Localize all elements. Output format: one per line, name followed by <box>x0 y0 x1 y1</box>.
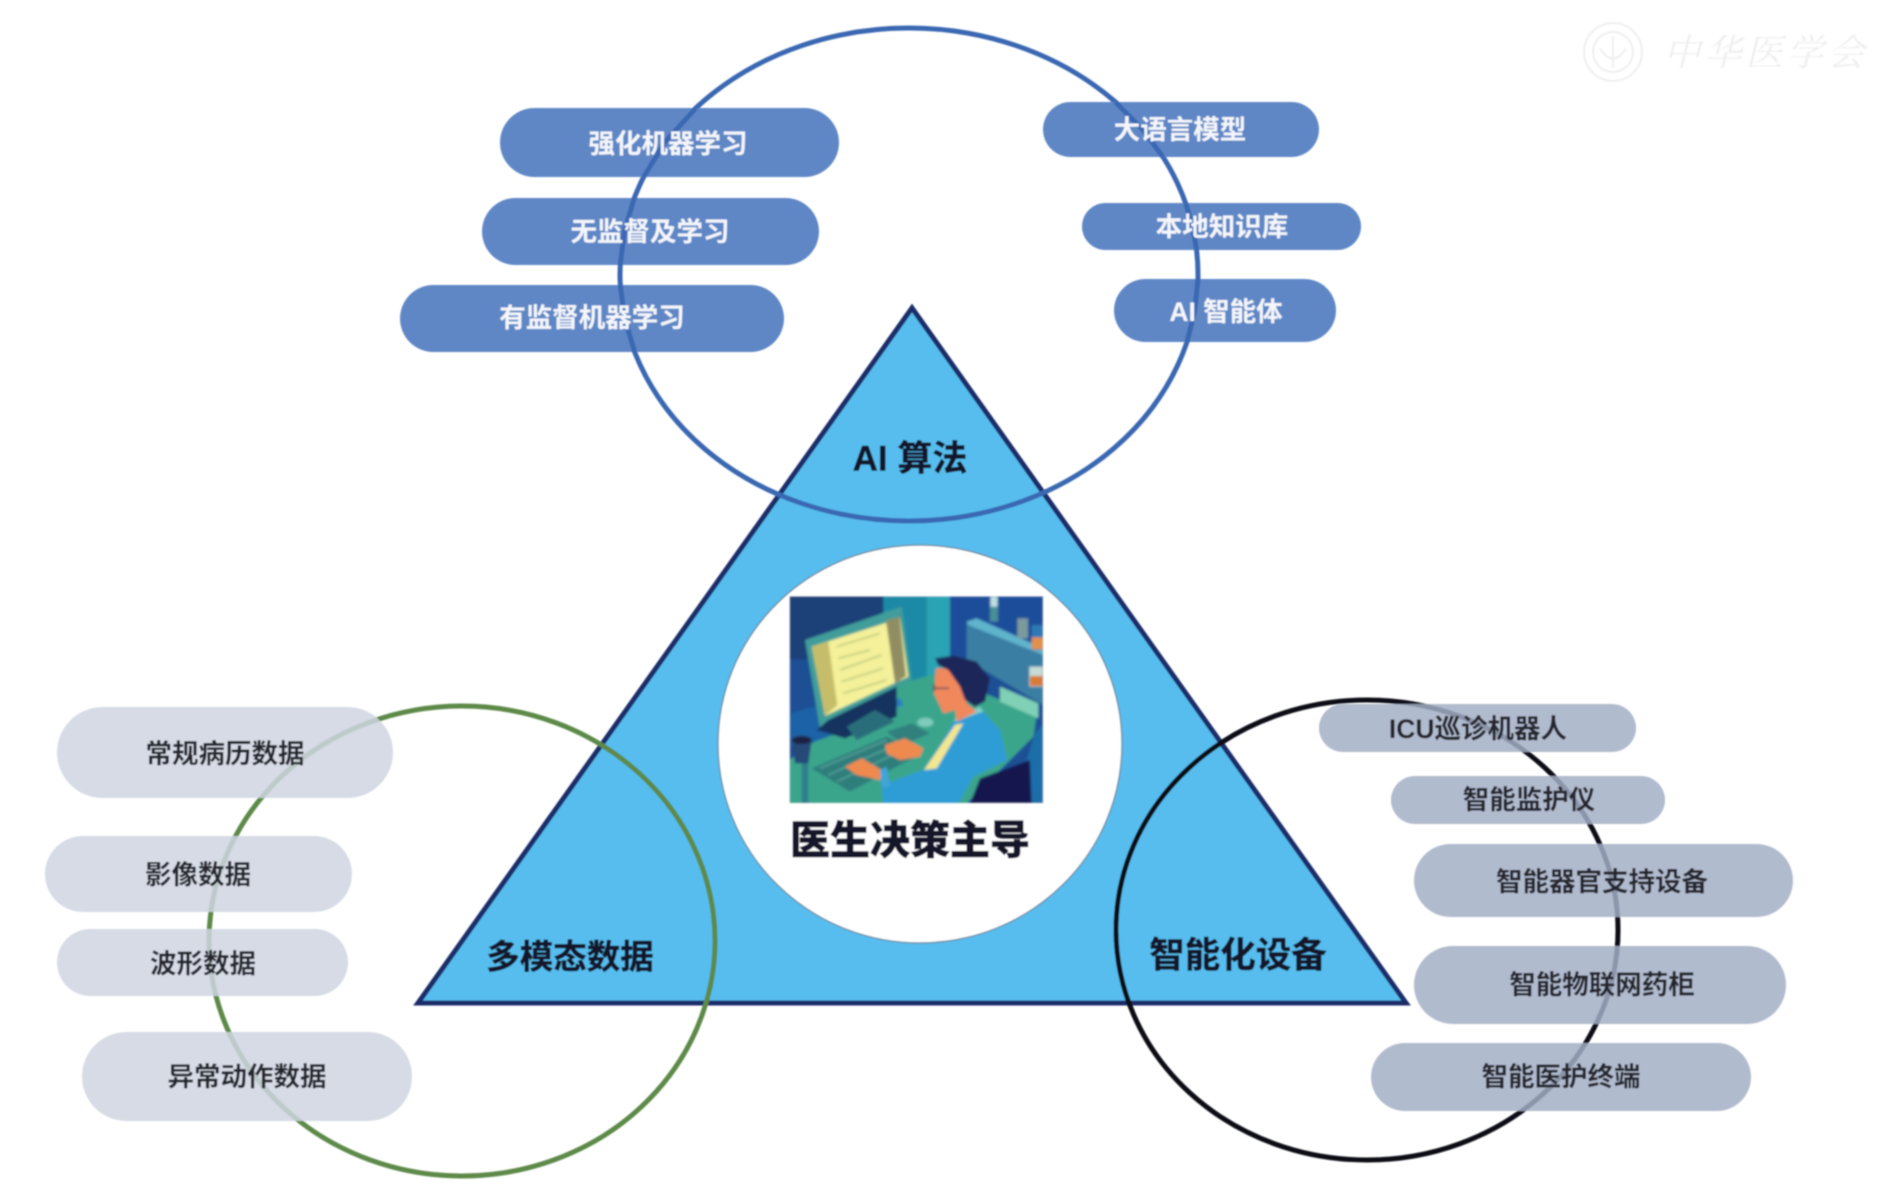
pill: organ support device <box>1414 844 1793 917</box>
pill: local knowledge base <box>1082 203 1361 250</box>
pill: smart monitor: 智能监护仪 <box>1463 785 1595 815</box>
group: smart device pills <box>1319 704 1793 1111</box>
group: AI algorithm pills <box>400 102 1361 352</box>
pill: smart care terminal <box>1371 1043 1751 1111</box>
pill: imaging data <box>45 836 352 912</box>
circle: multimodal data ring <box>209 706 715 1176</box>
pill: waveform data: 波形数据 <box>150 949 256 979</box>
pill: smart monitor <box>1391 776 1665 824</box>
pill: ICU robot: ICU巡诊机器人 <box>1389 714 1567 744</box>
pill: reinforcement learning: 强化机器学习 <box>588 129 748 159</box>
pill: routine records: 常规病历数据 <box>146 739 304 769</box>
label: multimodal data: 多模态数据 <box>486 940 654 976</box>
pill: waveform data <box>57 929 348 996</box>
group: multimodal data pills <box>45 707 412 1121</box>
heading: doctor-led decision: 医生决策主导 <box>790 819 1030 863</box>
pill: large language model <box>1043 102 1319 157</box>
pill: IoT drug cabinet: 智能物联网药柜 <box>1509 970 1695 1000</box>
pill: IoT drug cabinet <box>1414 946 1786 1024</box>
illustration: doctor at computer <box>789 596 1043 803</box>
body <box>882 710 1007 803</box>
pill: AI agent <box>1114 279 1336 342</box>
pill: organ support device: 智能器官支持设备 <box>1496 867 1708 897</box>
keyboard <box>812 737 922 792</box>
circle: AI algorithms ring <box>620 28 1198 521</box>
pill: smart care terminal: 智能医护终端 <box>1482 1062 1640 1092</box>
circle: smart devices ring <box>1116 700 1618 1160</box>
label: smart devices: 智能化设备 <box>1149 935 1327 975</box>
panel: central circle <box>718 545 1122 943</box>
watermark: society seal and name <box>1584 23 1868 81</box>
pill: abnormal motion data <box>82 1032 412 1121</box>
pill: routine records <box>57 707 393 798</box>
pill: unsupervised learning <box>482 198 819 265</box>
head <box>934 668 977 722</box>
pill: supervised machine learning <box>400 285 784 352</box>
cup <box>802 753 808 803</box>
pill: local knowledge base: 本地知识库 <box>1156 212 1288 242</box>
pill: large language model: 大语言模型 <box>1114 115 1246 145</box>
triangle: three pillars <box>418 308 1406 1003</box>
pill: reinforcement learning <box>500 108 839 177</box>
label: AI algorithms: AI 算法 <box>853 440 967 478</box>
hands <box>885 738 923 760</box>
icon: seal <box>1584 23 1642 81</box>
pill: abnormal motion data: 异常动作数据 <box>168 1062 326 1092</box>
pill: AI agent: AI 智能体 <box>1169 297 1283 327</box>
pill: imaging data: 影像数据 <box>145 860 251 890</box>
pill: supervised machine learning: 有监督机器学习 <box>499 303 685 333</box>
pill: unsupervised learning: 无监督及学习 <box>570 217 730 247</box>
watermark text: 中华医学会 <box>1664 34 1868 74</box>
monitor <box>805 607 912 728</box>
pill: ICU robot <box>1319 704 1636 752</box>
